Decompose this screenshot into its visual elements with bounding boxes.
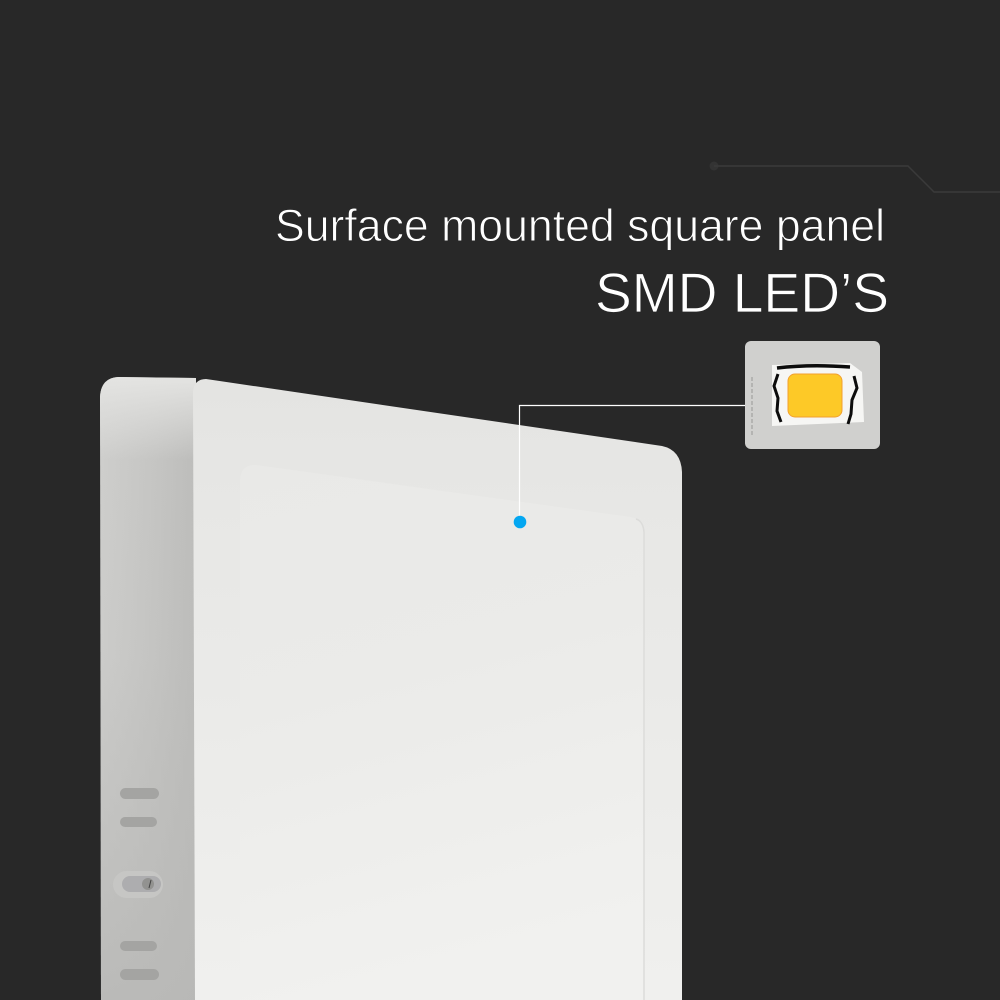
diffuser inner square bbox=[240, 465, 644, 1000]
decorative circuit line bbox=[710, 162, 1000, 192]
panel front face bbox=[193, 379, 682, 1000]
product: square LED panel bbox=[100, 377, 682, 1000]
icon: SMD LED chip bbox=[745, 341, 880, 449]
panel side edge bbox=[100, 377, 196, 1000]
heading: SMD LED'S: SMD LED’S bbox=[595, 261, 889, 324]
callout leader line bbox=[520, 406, 745, 522]
callout blue dot bbox=[514, 516, 526, 528]
side vents and switch bbox=[113, 788, 163, 980]
heading: product description: Surface mounted square panel bbox=[275, 200, 885, 251]
